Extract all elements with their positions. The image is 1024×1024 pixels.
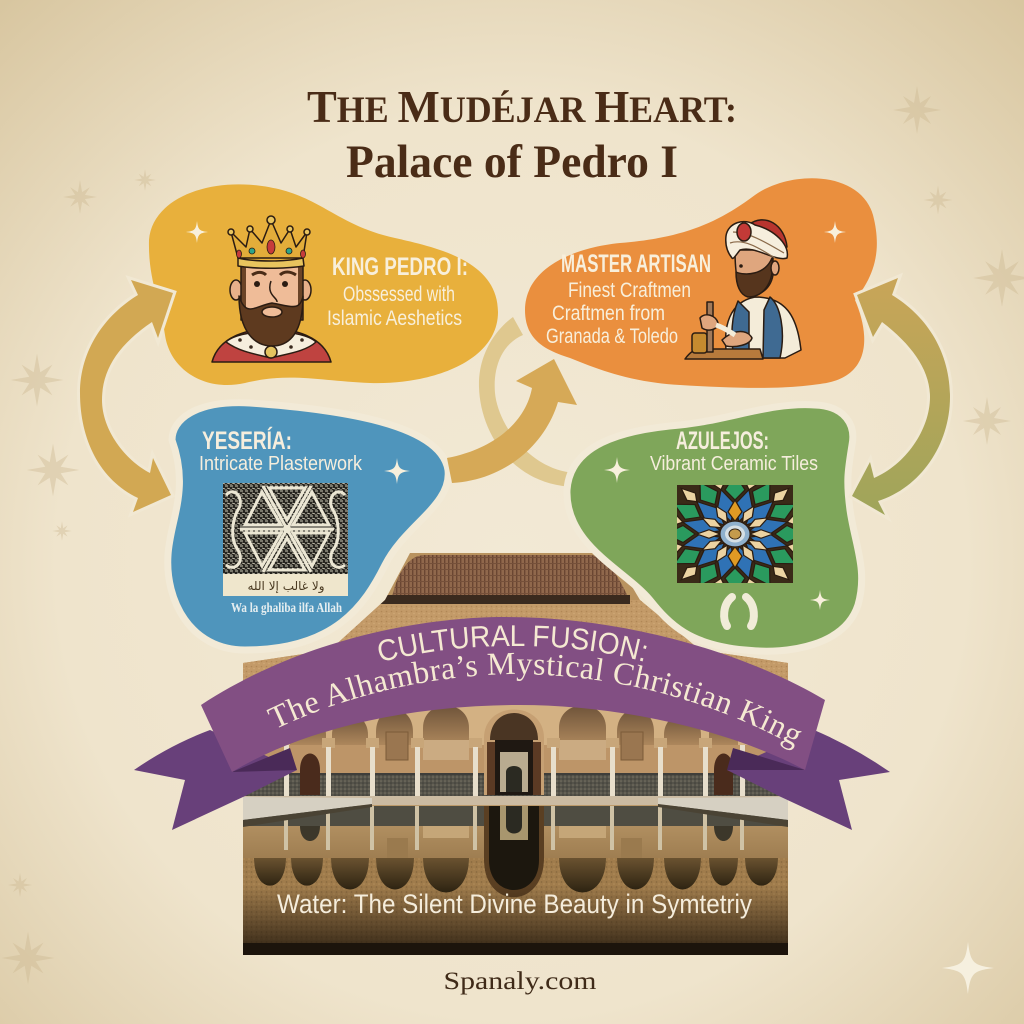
tile dado (243, 773, 788, 796)
icon: artisan portrait (685, 220, 801, 359)
text: King Pedro I: Obssessed with (343, 283, 455, 306)
caption: motto: Wa la ghaliba ilfa Allah (231, 600, 342, 615)
icon: sparkle (604, 457, 630, 483)
banner heading: CULTURAL FUSION: (378, 625, 647, 662)
icon: horseshoe (724, 597, 754, 626)
plasterwork panel (223, 483, 348, 596)
icon: sparkle (824, 221, 846, 243)
pale wall panels (423, 740, 606, 760)
text: Azulejos: Vibrant Ceramic Tiles (650, 453, 818, 475)
pool reflection (243, 805, 788, 898)
panel: Master Artisan (525, 178, 877, 388)
panel: Yesería (168, 403, 448, 650)
text: Yesería: Intricate Plasterwork (199, 453, 363, 475)
text: Master Artisan: Craftmen from (552, 302, 665, 325)
title: THE MUDÉJAR HEART: (307, 81, 737, 132)
central door (484, 710, 544, 795)
text: Master Artisan: Granada & Toledo (546, 325, 678, 348)
left ribbon tail (134, 730, 297, 830)
side doors (300, 754, 733, 795)
footer: Spanaly.com (444, 968, 597, 995)
text: Master Artisan: Finest Craftmen (568, 279, 691, 302)
text: Yesería: YESERÍA: (202, 426, 292, 455)
text: King Pedro I: Islamic Aeshetics (327, 307, 462, 330)
arrow: centre gold arrow (447, 359, 577, 483)
tile mosaic (677, 485, 793, 583)
panel: Azulejos (567, 405, 862, 651)
icon: sparkle (384, 458, 410, 484)
icon: sparkle (186, 221, 208, 243)
main ribbon (201, 617, 825, 772)
text: Master Artisan (546, 250, 711, 348)
pool floor (243, 796, 788, 827)
column capitals (322, 738, 712, 748)
stone base (243, 858, 788, 943)
photo: Alhambra court and reflecting pool (243, 553, 788, 955)
text: Master Artisan: MASTER ARTISAN (561, 250, 711, 278)
title (307, 81, 737, 188)
icon: small sparkle (810, 590, 830, 610)
arcade arches (290, 706, 738, 745)
icon: king portrait (212, 216, 331, 362)
arrow: pale curved arrow behind centre (479, 317, 575, 487)
caption: water: Water: The Silent Divine Beauty in Symtetriy (277, 889, 752, 919)
right fold (727, 748, 805, 770)
text: Azulejos: AZULEJOS: (676, 427, 769, 455)
arrow: right double-headed (852, 278, 950, 515)
text: Azulejos (650, 427, 818, 475)
text: King Pedro I: KING PEDRO I: (332, 253, 468, 281)
panel: King Pedro I (149, 184, 498, 385)
title: Palace of Pedro I (346, 136, 678, 188)
right ribbon tail (727, 730, 890, 830)
arrow: left double-headed (80, 280, 173, 512)
text: Yesería (199, 426, 363, 475)
banner subheading: The Alhambra’s Mystical Christian King (266, 652, 802, 750)
plasterwork panel: ولا غالب إلا الله (247, 579, 325, 594)
icon: large sparkle (942, 942, 994, 994)
banner: Cultural Fusion (134, 617, 890, 830)
columns (284, 745, 745, 797)
left fold (232, 748, 297, 772)
wall plaques (386, 732, 643, 760)
text: King Pedro I (327, 253, 468, 330)
